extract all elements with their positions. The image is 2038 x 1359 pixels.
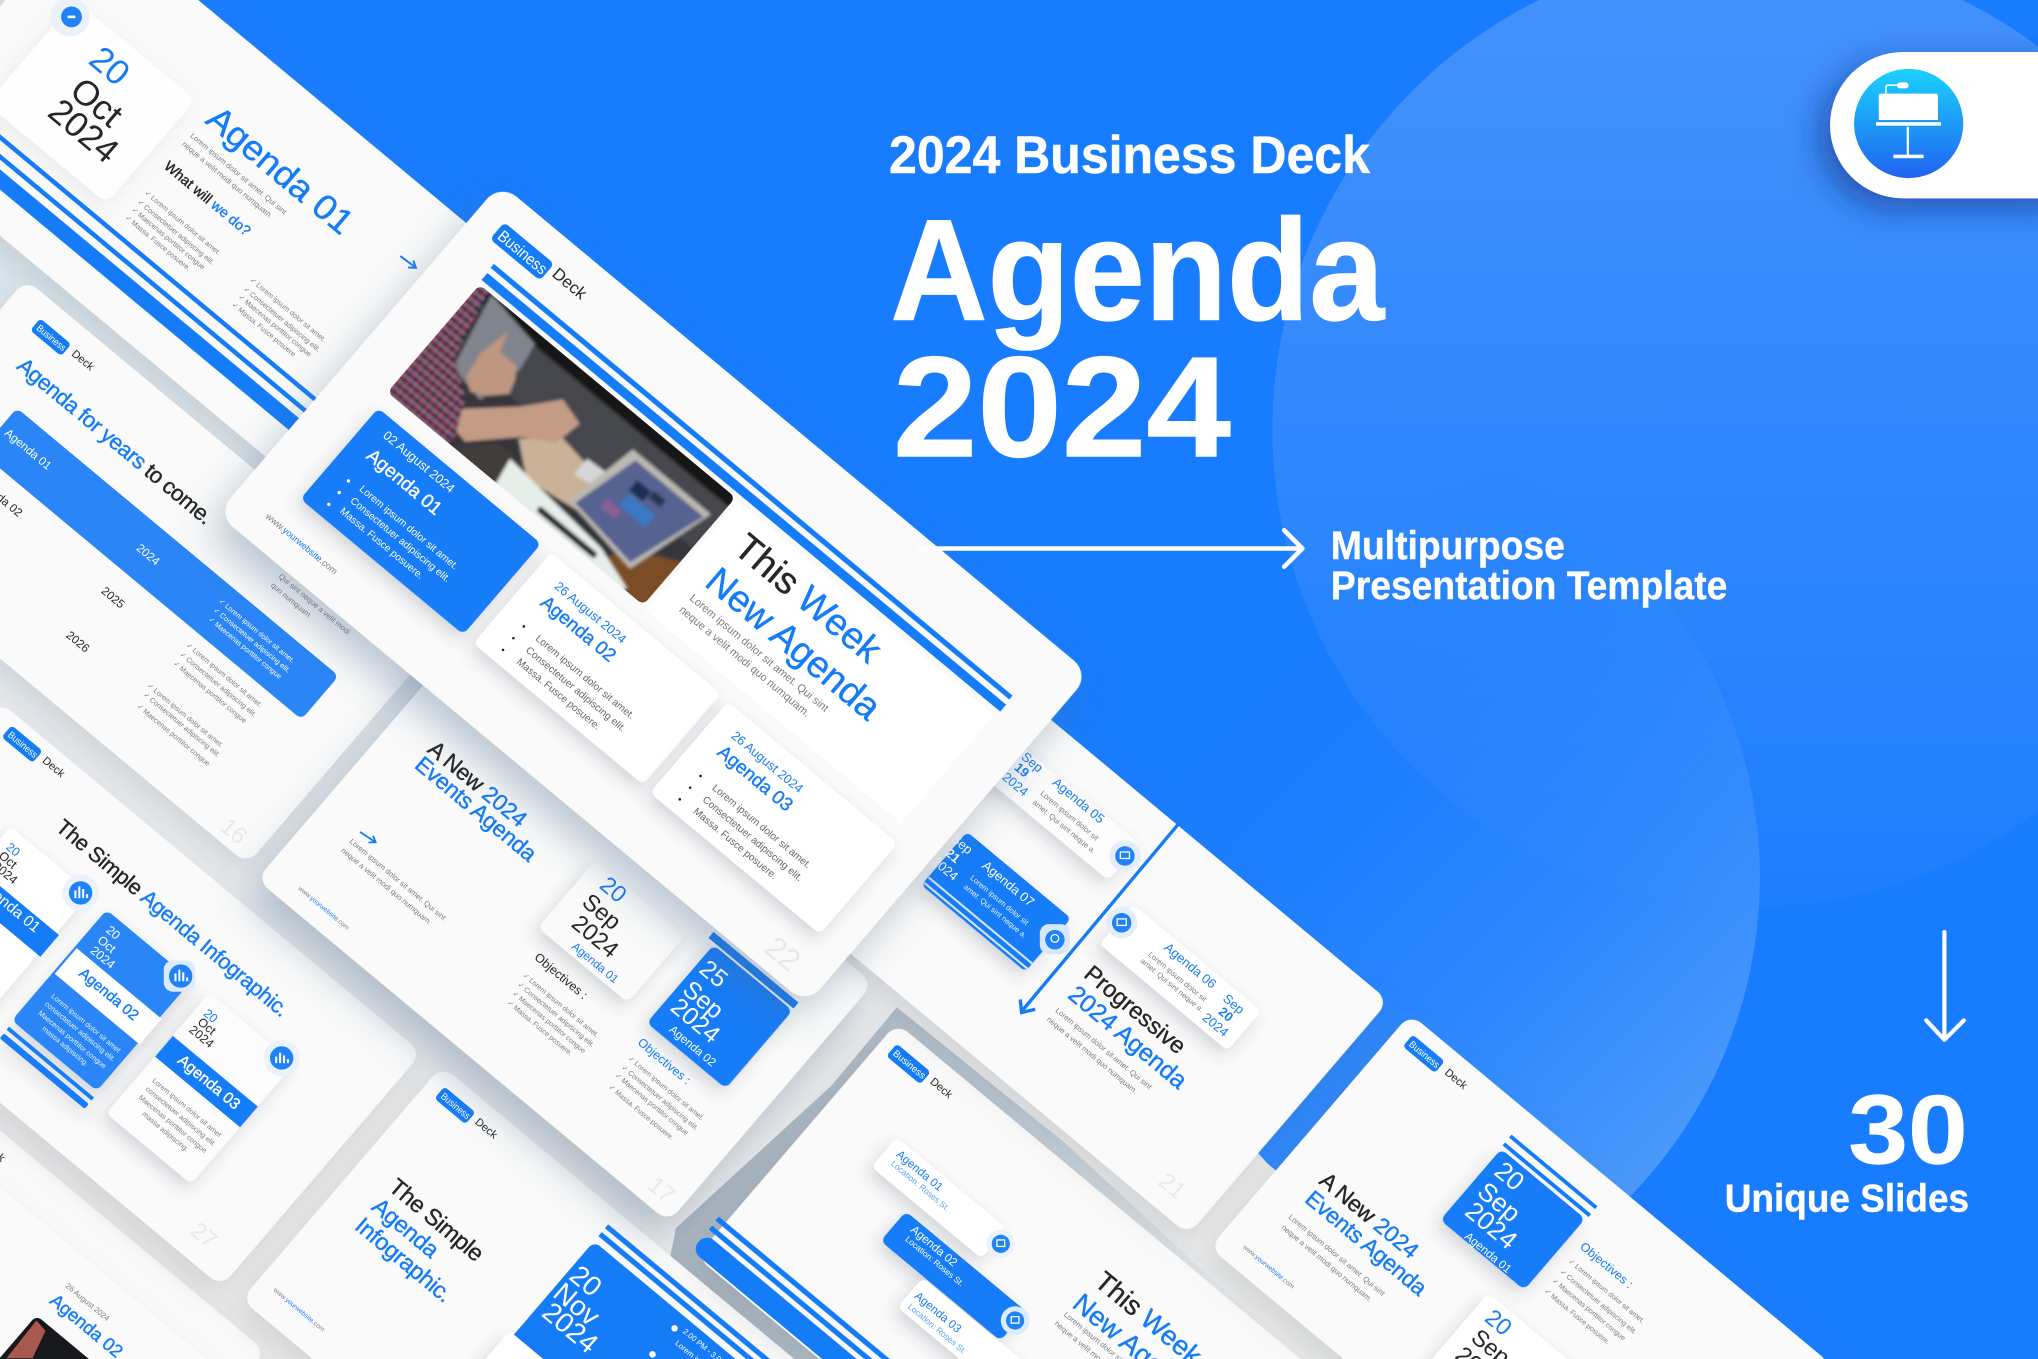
heading: Events Agenda bbox=[410, 751, 543, 867]
logo bbox=[1403, 1035, 1470, 1092]
heading: Infographic. bbox=[350, 1212, 458, 1307]
slide: Progressive 2024 Agenda (21) bbox=[766, 650, 1389, 1235]
icon: chart badge 2 bbox=[164, 961, 195, 992]
slide: The Simple Agenda Infographic (27) bbox=[0, 702, 422, 1287]
heading: The Simple Agenda Infographic. bbox=[51, 815, 293, 1022]
agenda card 1: Location: Roses St. bbox=[889, 1158, 952, 1213]
blue date card: Agenda 01 bbox=[1462, 1230, 1514, 1276]
check list 2: ✓ Consectetuer adipiscing elit. bbox=[242, 285, 322, 354]
heading bbox=[350, 1173, 489, 1307]
objectives dark: ✓ Maecenas porttitor congue bbox=[511, 990, 587, 1055]
blue date card: 2024 bbox=[665, 993, 725, 1049]
title: Agenda bbox=[890, 189, 1386, 351]
blue card: Agenda 01: Agenda 01 bbox=[363, 445, 446, 519]
paragraph: Lorem ipsum dolor sit amet. Qui sint bbox=[188, 131, 289, 217]
objectives dark: ✓ Massa. Fusce posuere. bbox=[506, 999, 574, 1058]
arrow: down bbox=[1926, 932, 1964, 1040]
objectives dark: ✓ Lorem ipsum dolor sit amet. bbox=[521, 972, 600, 1039]
blue date card: 25 bbox=[694, 955, 733, 993]
slide count: 30 bbox=[1848, 1074, 1968, 1184]
date card: 2024 bbox=[536, 1296, 604, 1359]
slide: The Simple Agenda (20 Nov) bbox=[241, 1066, 864, 1359]
card Agenda 05: Sep bbox=[1019, 749, 1046, 775]
card 3: Oct bbox=[195, 1015, 219, 1038]
slide count bbox=[1725, 1074, 1969, 1220]
icon: chart badge 3 bbox=[263, 1040, 300, 1076]
objectives blue: Objectives : bbox=[635, 1035, 694, 1087]
logo bbox=[2, 725, 67, 780]
slide: bottom left Agenda 02 bbox=[0, 1101, 318, 1359]
card Agenda 07: 2024 bbox=[929, 854, 961, 884]
card Agenda 06: Agenda 06 bbox=[1161, 940, 1219, 991]
tagline: Multipurpose bbox=[1331, 523, 1565, 568]
slide: Agenda for years bbox=[0, 279, 448, 864]
table rows: 2025 bbox=[99, 585, 127, 611]
objectives: ✓ Consectetuer adipiscing elit. bbox=[1558, 1268, 1638, 1336]
list 3: ✓ Lorem ipsum dolor sit amet. bbox=[146, 682, 225, 749]
card 1: 20 bbox=[3, 840, 23, 859]
check list 1: ✓ Maecenas porttitor congue bbox=[130, 206, 206, 271]
slide number: 22 bbox=[758, 929, 808, 978]
check list 1 bbox=[123, 189, 222, 272]
slide: This Week New Agenda lower bbox=[691, 1023, 1319, 1359]
card 3: Lorem ipsum dolor sit amet bbox=[150, 1076, 224, 1139]
card 3: Maecenas porttitor congue bbox=[137, 1093, 209, 1155]
objectives: ✓ Maecenas porttitor congue bbox=[1551, 1277, 1627, 1342]
check list 2: ✓ Lorem ipsum dolor sit amet. bbox=[248, 276, 327, 344]
slide: A New 2024 Events Agenda (17) bbox=[257, 641, 873, 1222]
table rows bbox=[0, 474, 127, 655]
logo: Business bbox=[5, 730, 39, 761]
slide count: Unique Slides bbox=[1725, 1177, 1969, 1220]
card 3: Agenda 03 bbox=[174, 1052, 243, 1113]
card 2 text: consectetuer adipiscing elit. bbox=[43, 999, 117, 1063]
icon badge bbox=[987, 1230, 1015, 1258]
paragraph: neque a velit modi quo numquam. bbox=[1045, 1015, 1140, 1096]
stripes bbox=[1503, 1135, 1598, 1217]
icon: chart badge 1 bbox=[62, 875, 99, 911]
icon badge bbox=[1106, 907, 1137, 938]
agenda card 3: Agenda 03 bbox=[912, 1290, 964, 1336]
date card bbox=[538, 860, 685, 1002]
card 2 text: Maecenas porttitor congue bbox=[36, 1008, 108, 1070]
list 2: ✓ Maecenas porttitor congue bbox=[172, 660, 248, 725]
card 2 text: massa adipiscing. bbox=[40, 1024, 91, 1068]
agenda card 3 bbox=[897, 1278, 1033, 1359]
check list 2 bbox=[230, 276, 327, 360]
stripes bbox=[481, 264, 1013, 712]
heading: Progressive bbox=[1079, 960, 1191, 1059]
card Agenda 05: amet. Qui sint neque a. bbox=[1031, 798, 1097, 855]
card Agenda 05: 2024 bbox=[999, 769, 1031, 799]
agenda card 1 bbox=[871, 1137, 1007, 1258]
title bbox=[890, 189, 1386, 487]
keynote badge bbox=[1830, 52, 2038, 198]
subheading: What will we do? bbox=[161, 159, 253, 239]
card 2 text: 20 bbox=[103, 923, 123, 943]
table header band bbox=[0, 408, 339, 719]
blue date card: Sep bbox=[1472, 1176, 1527, 1228]
paragraph: Lorem ipsum dolor sit amet. Qui sint bbox=[1054, 1006, 1154, 1092]
white panel with heading: neque a velit modi quo numquam. bbox=[677, 604, 812, 720]
card 2 text: Oct bbox=[95, 933, 119, 956]
card 2 text bbox=[36, 923, 142, 1070]
website: www.yourwebsite.com bbox=[271, 1286, 326, 1333]
white card bbox=[467, 1331, 609, 1359]
list 3: ✓ Maecenas porttitor congue bbox=[135, 703, 212, 768]
logo: Business bbox=[34, 323, 68, 354]
photo: meeting with hands and laptop bbox=[390, 287, 733, 602]
paragraph: Lorem ipsum dolor sit amet. Qui sint bbox=[1287, 1213, 1387, 1298]
icon badge bbox=[1109, 840, 1141, 872]
logo: Deck bbox=[1442, 1067, 1470, 1092]
icon badge bbox=[1001, 1306, 1029, 1335]
objectives blue: ✓ Consectetuer adipiscing elit. bbox=[620, 1064, 700, 1132]
check list 2: ✓ Maecenas porttitor congue bbox=[237, 293, 313, 358]
pale base under the slide collage bbox=[0, 0, 1456, 1359]
date card: 20 bbox=[82, 39, 137, 93]
date card: 20 bbox=[595, 871, 632, 908]
card Agenda 05 bbox=[956, 717, 1140, 880]
agenda card 3: Location: Roses St. bbox=[906, 1301, 969, 1356]
website: www.yourwebsite.com bbox=[263, 511, 340, 576]
date card: Sep bbox=[577, 888, 626, 935]
date card: Agenda 01 bbox=[569, 940, 621, 986]
card Agenda 07: Agenda 07 bbox=[979, 858, 1037, 909]
blue date card: 2024 bbox=[1459, 1195, 1523, 1255]
side note: Qui sint neque a velit modi bbox=[277, 572, 352, 637]
white card: Agenda 03: Agenda 03 bbox=[714, 741, 797, 815]
card 3: 2024 bbox=[186, 1023, 217, 1051]
icon badge bbox=[1040, 924, 1070, 954]
card 1 bbox=[0, 827, 90, 1014]
slide number: 21 bbox=[1154, 1168, 1191, 1204]
card 2 bbox=[0, 910, 192, 1109]
paragraph: neque a velit modi quo numquam. bbox=[339, 846, 434, 927]
heading: 2024 Agenda bbox=[1063, 981, 1192, 1095]
date card: Oct bbox=[63, 70, 130, 135]
agenda card 2 bbox=[881, 1211, 1026, 1341]
date card: 2024 bbox=[41, 91, 126, 171]
white card: Agenda 03: Massa. Fusce posuere. bbox=[691, 806, 779, 882]
agenda card 1: Agenda 01 bbox=[894, 1148, 946, 1194]
blue card: Agenda 01: 02 August 2024 bbox=[380, 428, 458, 496]
date card bbox=[492, 1241, 824, 1359]
table header band: Agenda 01 bbox=[2, 427, 54, 473]
blue date card bbox=[1440, 1149, 1585, 1290]
logo: Business bbox=[890, 1048, 928, 1082]
white card: Agenda 03: 26 August 2024 bbox=[729, 728, 806, 796]
main slide: This Week New Agenda bbox=[217, 183, 1090, 1005]
card Agenda 06: 20 bbox=[1216, 1004, 1236, 1025]
date card: Nov bbox=[548, 1277, 606, 1332]
card Agenda 06: Sep bbox=[1220, 991, 1248, 1017]
logo: Business bbox=[1406, 1039, 1442, 1071]
heading: Agenda bbox=[367, 1193, 445, 1264]
white panel with heading: This Week bbox=[727, 525, 890, 671]
list 3: ✓ Consectetuer adipiscing elit. bbox=[142, 691, 222, 759]
stripes bbox=[691, 1217, 939, 1359]
white card: Agenda 02: Consectetuer adipiscing elit. bbox=[523, 645, 628, 734]
white card: Agenda 02: Lorem ipsum dolor sit amet. bbox=[533, 633, 636, 722]
objectives dark bbox=[506, 950, 600, 1058]
card Agenda 07: Sep bbox=[948, 831, 976, 857]
side note: quo numquam. bbox=[269, 581, 314, 620]
list 2: ✓ Consectetuer adipiscing elit. bbox=[178, 651, 258, 719]
blue card: Agenda 01: Massa. Fusce posuere. bbox=[337, 506, 425, 582]
website: www.yourwebsite.com bbox=[1240, 1243, 1295, 1290]
logo bbox=[434, 1087, 500, 1142]
white card: Agenda 03: Lorem ipsum dolor sit amet. bbox=[710, 783, 813, 871]
tagline: Presentation Template bbox=[1331, 563, 1727, 608]
heading: A New 2024 bbox=[1315, 1167, 1424, 1263]
lower date card: 20 bbox=[1480, 1304, 1517, 1340]
slide number: 16 bbox=[216, 813, 252, 849]
card 2 text: 2024 bbox=[88, 943, 118, 972]
blue date card: Sep bbox=[677, 976, 729, 1025]
white card: Agenda 02 bbox=[473, 552, 721, 785]
website: www.yourwebsite.com bbox=[296, 885, 350, 932]
background circle: top right bbox=[1272, 0, 2038, 907]
card Agenda 05: 19 bbox=[1011, 760, 1032, 780]
stripes bbox=[598, 1224, 808, 1359]
card Agenda 07 bbox=[921, 831, 1071, 972]
heading: The Simple bbox=[384, 1173, 489, 1266]
objectives dark: Objectives : bbox=[532, 950, 590, 1002]
date card: 20 bbox=[564, 1259, 608, 1303]
card 3: consectetuer adipiscing elit. bbox=[144, 1084, 218, 1148]
check list 1: ✓ Lorem ipsum dolor sit amet. bbox=[143, 189, 222, 257]
card Agenda 06: Lorem ipsum dolor sit bbox=[1146, 950, 1209, 1004]
logo: Deck bbox=[927, 1076, 955, 1101]
logo: Deck bbox=[548, 264, 591, 304]
white card: Agenda 02: 26 August 2024 bbox=[552, 578, 630, 646]
arrow: timeline bbox=[1020, 819, 1183, 1012]
card Agenda 05: Agenda 05 bbox=[1050, 775, 1108, 826]
card 3: 20 bbox=[201, 1006, 221, 1026]
objectives blue: ✓ Massa. Fusce posuere. bbox=[607, 1083, 675, 1142]
slide: Agenda 01 bbox=[0, 0, 508, 491]
card 3 bbox=[106, 993, 294, 1184]
white panel with heading bbox=[645, 502, 994, 823]
check list 2: ✓ Massa. Fusce posuere. bbox=[230, 301, 298, 360]
list 2: ✓ Lorem ipsum dolor sit amet. bbox=[185, 641, 264, 709]
card Agenda 06 bbox=[1100, 905, 1261, 1051]
slide: A New 2024 Events Agenda (right) bbox=[1210, 1014, 1832, 1359]
check list 1: ✓ Massa. Fusce posuere. bbox=[123, 214, 192, 272]
list on band: ✓ Consectetuer adipiscing elit. bbox=[212, 606, 292, 675]
stripes bbox=[0, 91, 348, 466]
logo: Business bbox=[438, 1091, 472, 1122]
slide: lower-left partial with logo bbox=[0, 1001, 266, 1359]
objectives blue bbox=[607, 1035, 706, 1142]
card 2 text: Lorem ipsum dolor sit amet bbox=[49, 992, 123, 1054]
logo bbox=[886, 1044, 955, 1101]
objectives bbox=[1543, 1239, 1646, 1346]
white card: Agenda 02: Agenda 02 bbox=[537, 591, 621, 666]
slide number: 27 bbox=[186, 1217, 223, 1253]
blue card: Agenda 01: Consectetuer adipiscing elit. bbox=[348, 496, 452, 585]
table header band: 2024 bbox=[134, 542, 162, 568]
shadow gap between slides bbox=[650, 1007, 1300, 1359]
date: 26 August 2024 bbox=[64, 1281, 112, 1323]
logo: Deck bbox=[472, 1116, 500, 1142]
logo bbox=[30, 318, 96, 374]
subtitle: 2024 Business Deck bbox=[889, 126, 1370, 185]
paragraph: neque a velit modi quo numquam. bbox=[1280, 1223, 1374, 1304]
logo bbox=[490, 222, 591, 304]
card Agenda 07: amet. Qui sint neque a. bbox=[962, 882, 1029, 940]
blue date card: Agenda 02 bbox=[666, 1023, 718, 1069]
title: 2024 bbox=[893, 328, 1231, 487]
white card: Agenda 03 bbox=[650, 702, 898, 934]
background circle: lower bbox=[845, 420, 1760, 1335]
blue date card bbox=[647, 945, 793, 1089]
logo: Deck bbox=[40, 755, 67, 780]
white card: Agenda 02: Massa. Fusce posuere. bbox=[514, 657, 602, 732]
objectives blue: ✓ Maecenas porttitor congue bbox=[613, 1072, 690, 1137]
arrow bbox=[400, 256, 416, 268]
arrow bbox=[360, 832, 376, 842]
arrow: to tagline bbox=[920, 530, 1302, 567]
check list 1: ✓ Consectetuer adipiscing elit. bbox=[136, 198, 216, 267]
table rows: 2026 bbox=[63, 629, 92, 655]
card Agenda 06: amet. Qui sint neque a. bbox=[1139, 956, 1205, 1014]
date card bbox=[0, 0, 195, 203]
icon: corner badge bbox=[51, 0, 90, 36]
logo: Deck bbox=[69, 348, 96, 374]
logo: Business bbox=[494, 227, 551, 278]
objectives: ✓ Lorem ipsum dolor sit amet. bbox=[1567, 1257, 1646, 1325]
tagline bbox=[1331, 523, 1727, 608]
list on band: ✓ Maecenas porttitor congue bbox=[207, 615, 283, 681]
slide number: 17 bbox=[643, 1171, 680, 1208]
objectives dark: ✓ Consectetuer adipiscing elit. bbox=[516, 981, 596, 1049]
card 2 text: Agenda 02 bbox=[75, 965, 142, 1024]
paragraph: Lorem ipsum dolor sit amet. Qui sint bbox=[348, 837, 448, 923]
blue card: Agenda 01 bbox=[300, 408, 541, 634]
card Agenda 05: Lorem ipsum dolor sit bbox=[1038, 789, 1101, 843]
blue date card: 20 bbox=[1489, 1155, 1531, 1197]
stripes bbox=[708, 932, 799, 1009]
white panel with heading: New Agenda bbox=[698, 559, 890, 728]
card Agenda 06: 2024 bbox=[1200, 1010, 1232, 1040]
objectives: Objectives : bbox=[1577, 1239, 1636, 1291]
heading: Agenda 01 bbox=[199, 99, 361, 242]
photo bbox=[0, 1315, 146, 1359]
white card: Agenda 03: Consectetuer adipiscing elit. bbox=[700, 795, 804, 884]
objectives blue: ✓ Lorem ipsum dolor sit amet. bbox=[626, 1055, 706, 1122]
heading: Events Agenda bbox=[1300, 1185, 1433, 1301]
card Agenda 07: Lorem ipsum dolor sit bbox=[968, 873, 1031, 928]
heading: A New 2024 bbox=[423, 735, 532, 832]
agenda card 2: Agenda 02 bbox=[908, 1223, 960, 1269]
heading: Agenda for years to come. bbox=[12, 353, 218, 529]
card 3: massa adipiscing. bbox=[140, 1109, 191, 1153]
paragraph: neque a velit modi quo numquam. bbox=[180, 140, 275, 220]
icon: keynote podium bbox=[1876, 82, 1941, 158]
date card: 2024 bbox=[567, 910, 624, 963]
objectives: ✓ Massa. Fusce posuere. bbox=[1543, 1287, 1611, 1346]
agenda card 2: Location: Roses St. bbox=[903, 1234, 966, 1288]
white panel with heading: Lorem ipsum dolor sit amet. Qui sint bbox=[687, 592, 831, 715]
card Agenda 07: 21 bbox=[943, 845, 963, 866]
blue card: Agenda 01: Lorem ipsum dolor sit amet. bbox=[357, 484, 460, 572]
lower date card bbox=[1429, 1293, 1578, 1359]
list on band: ✓ Lorem ipsum dolor sit amet. bbox=[217, 597, 296, 665]
